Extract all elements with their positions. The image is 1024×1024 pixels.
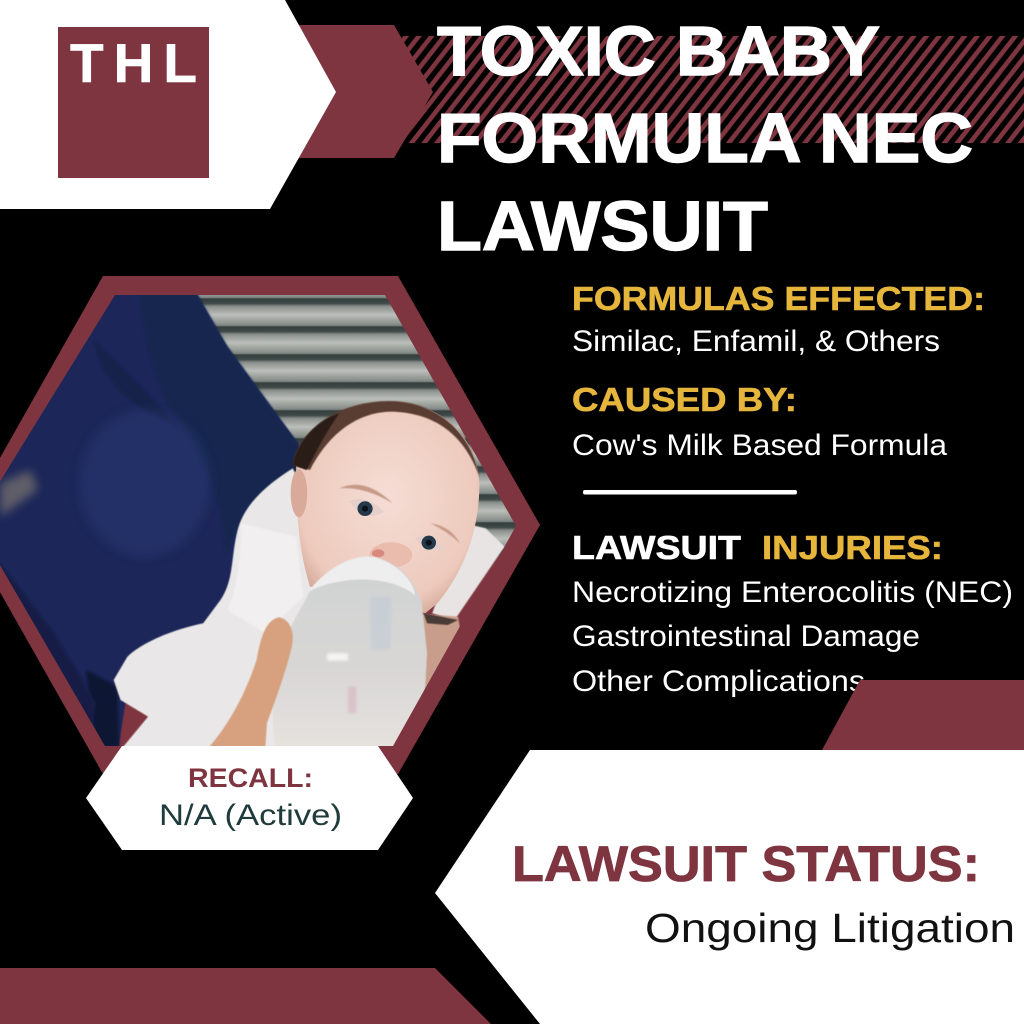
formulas effected: Similac, Enfamil, & Others xyxy=(572,325,940,358)
title: LAWSUIT xyxy=(437,187,768,265)
caused by xyxy=(572,381,947,462)
feeding hand thumb xyxy=(207,617,293,750)
lawsuit status panel: LAWSUIT STATUS: xyxy=(512,836,980,892)
recall pill: RECALL: xyxy=(188,763,313,793)
caused by: Cow's Milk Based Formula xyxy=(572,429,947,462)
feeding bottle xyxy=(273,556,427,750)
photo panel: baby being bottle-fed xyxy=(0,276,540,774)
baby ear xyxy=(291,469,307,517)
lawsuit injuries: Gastrointestinal Damage xyxy=(572,620,920,653)
title: TOXIC BABY xyxy=(437,12,880,90)
lawsuit injuries xyxy=(572,529,1013,698)
recall pill xyxy=(86,746,413,850)
baby nose xyxy=(370,542,412,568)
title: FORMULA NEC xyxy=(437,99,973,177)
baby left eye xyxy=(349,499,384,516)
logo: THL xyxy=(58,27,209,178)
photo background: window blinds xyxy=(197,295,516,557)
maroon accent trapezoid xyxy=(822,680,1024,750)
formulas effected xyxy=(572,280,985,358)
bottom maroon bar xyxy=(0,968,491,1024)
white logo panel xyxy=(0,0,336,209)
maroon chevron xyxy=(298,25,433,158)
lawsuit status panel: Ongoing Litigation xyxy=(645,905,1015,951)
lawsuit injuries: LAWSUIT xyxy=(572,529,741,566)
caused by: CAUSED BY: xyxy=(572,381,797,418)
lawsuit status panel xyxy=(435,750,1024,1024)
title xyxy=(437,12,973,265)
baby right eye xyxy=(415,536,444,550)
formulas effected: FORMULAS EFFECTED: xyxy=(572,280,985,317)
lawsuit injuries: Necrotizing Enterocolitis (NEC) xyxy=(572,576,1013,609)
navy sweater xyxy=(0,290,300,747)
brow shading xyxy=(339,485,460,543)
logo: THL: THL xyxy=(70,32,197,94)
hatched title band xyxy=(400,36,1024,143)
lawsuit injuries: Other Complications xyxy=(572,665,865,698)
lawsuit injuries: INJURIES: xyxy=(762,529,943,566)
dark shadow under chin xyxy=(424,613,458,625)
baby head xyxy=(291,401,479,613)
recall pill: N/A (Active) xyxy=(159,799,342,832)
white towel xyxy=(114,468,505,750)
baby skin below bottle xyxy=(422,614,460,689)
